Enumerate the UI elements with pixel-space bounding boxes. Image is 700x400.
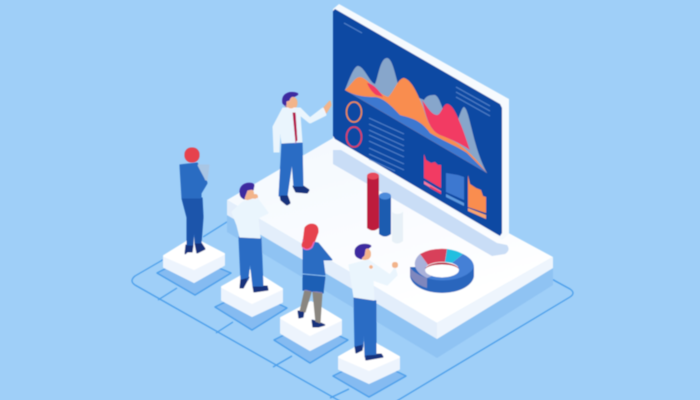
pedestal 2 [215,270,287,330]
donut chart [410,249,474,293]
circuit lines on the floor [132,220,573,400]
woman with red hair [298,224,332,327]
monitor [333,4,509,240]
pedestal 3 [274,302,348,363]
man pointing at the screen [273,92,331,205]
pedestal 4 [333,340,406,397]
monitor stand [333,150,509,256]
area chart [345,58,487,173]
red cylinder [367,176,379,230]
monitor screen [333,9,502,236]
small bar charts [424,154,486,219]
man gesturing at donut [349,244,398,360]
monitor frame [333,4,509,240]
platform shadow [227,215,553,358]
screen text lines [344,23,490,171]
ring gauges [346,102,362,147]
platform [227,138,553,339]
white cylinder [392,211,403,244]
blue cylinder [379,196,391,236]
woman with tablet [180,148,209,254]
man with hand on chin [232,183,268,292]
cylinder bars [367,172,403,244]
pedestal 1 [157,238,231,295]
